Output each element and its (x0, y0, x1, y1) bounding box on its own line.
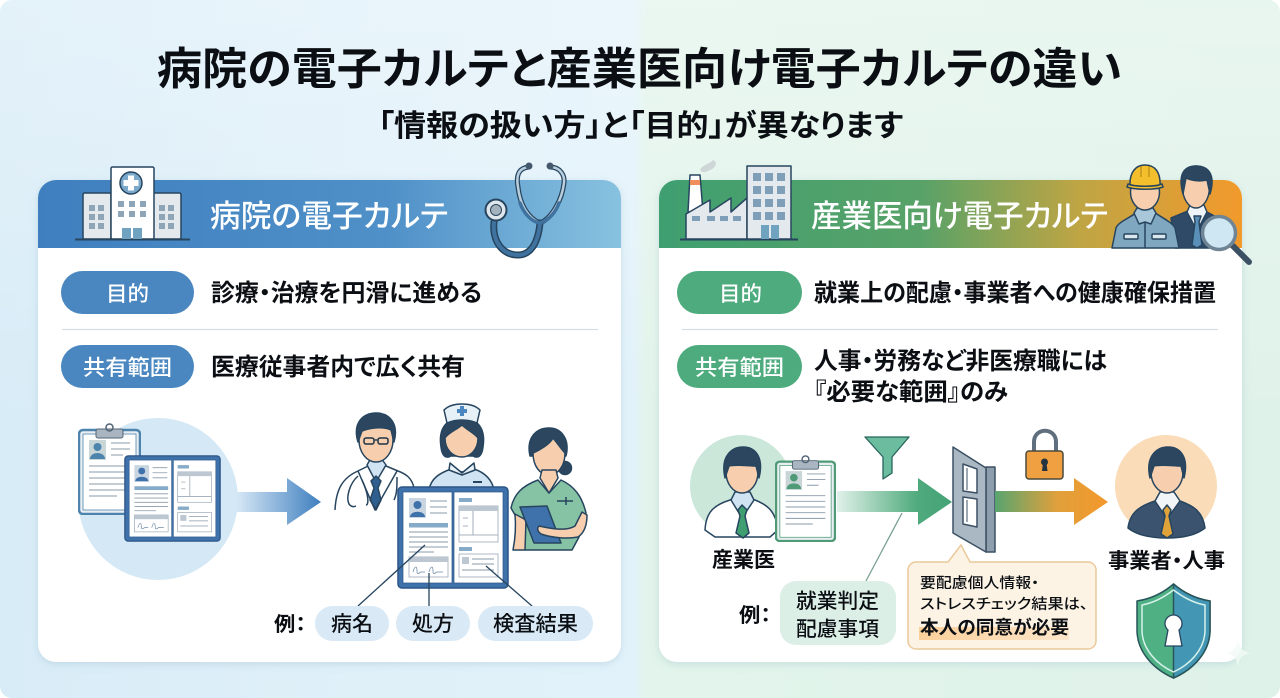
pill text: 共有範囲 (83, 356, 172, 380)
panel header band (38, 180, 621, 248)
arrow: to gate (837, 478, 952, 525)
panel: hospital EMR (38, 162, 621, 662)
icon: shield with keyhole (1137, 584, 1210, 678)
icon: padlock (1026, 431, 1063, 479)
icon: large record book (398, 487, 508, 588)
icon: hospital building (75, 167, 190, 240)
icon: nurse (429, 404, 494, 500)
callout: consent: 本人の同意が必要 (920, 617, 1069, 638)
example pill: 就業判定 (796, 590, 879, 613)
icon: filter funnel (865, 437, 909, 479)
heading: occupational EMR: 産業医向け電子カルテ (811, 199, 1108, 234)
purpose text: 就業上の配慮・事業者への健康確保措置 (814, 280, 1216, 307)
arrow: to employer (995, 478, 1108, 525)
pill text: 目的 (719, 283, 762, 306)
scope text: 『必要な範囲』のみ (814, 379, 1008, 406)
icon: gate door (953, 447, 995, 552)
icon: worker and manager with magnifier (1112, 165, 1249, 262)
pill text: 共有範囲 (695, 356, 784, 380)
icon: stethoscope (486, 162, 564, 255)
icon: employer person (1115, 435, 1217, 538)
label pill: sharing scope (61, 345, 194, 388)
panel background (659, 180, 1242, 662)
pill text: 目的 (106, 283, 149, 306)
label pill: sharing scope (677, 345, 802, 388)
scope text: 医療従事者内で広く共有 (211, 354, 465, 381)
icon: circle backdrop (78, 418, 238, 580)
subtitle: 「情報の扱い方」と「目的」が異なります (378, 109, 904, 143)
panel: occupational physician EMR (659, 160, 1249, 678)
example text: test results: 検査結果 (493, 613, 578, 636)
label pill: purpose (61, 271, 194, 314)
label pill: purpose (677, 271, 802, 314)
purpose row (61, 271, 482, 314)
example text: diagnosis: 病名 (331, 613, 373, 636)
leader line (866, 513, 902, 581)
icon: nurse in scrubs (511, 428, 587, 550)
callout: consent (908, 545, 1096, 649)
purpose row (677, 271, 1216, 314)
sharing scope row (677, 345, 1107, 406)
example pill (780, 581, 896, 645)
sparkle mark (1225, 640, 1251, 666)
callout: consent: 要配慮個人情報・ (920, 575, 1039, 592)
icon: clipboard (79, 424, 140, 514)
examples row (274, 606, 593, 641)
panel background (38, 180, 621, 662)
example pill: diagnosis (315, 606, 389, 641)
example pill: 配慮事項 (796, 618, 880, 641)
label: occupational physician: 産業医 (712, 549, 775, 572)
arrow: sharing (237, 478, 321, 525)
scope text (814, 348, 1107, 406)
example pill: prescription (396, 606, 470, 641)
example text: prescription: 処方 (412, 613, 454, 636)
callout: consent: ストレスチェック結果は、 (920, 596, 1088, 613)
purpose text: 診療・治療を円滑に進める (211, 280, 482, 307)
icon: record book (125, 456, 220, 541)
leader lines (358, 545, 532, 606)
example label: 例： (739, 604, 771, 627)
example pill: test results (478, 606, 593, 641)
panel header band (659, 180, 1242, 248)
heading: hospital EMR: 病院の電子カルテ (210, 199, 448, 234)
sharing scope row (61, 345, 465, 388)
icon: occupational physician (690, 435, 792, 538)
label: employer and HR: 事業者・人事 (1108, 549, 1225, 573)
title: 病院の電子カルテと産業医向け電子カルテの違い (157, 45, 1122, 94)
icon: doctor (335, 413, 414, 510)
scope text: 人事・労務など非医療職には (814, 348, 1107, 375)
icon: factory and office (680, 160, 798, 240)
icon: clipboard (776, 456, 835, 541)
example label: 例： (274, 613, 306, 636)
